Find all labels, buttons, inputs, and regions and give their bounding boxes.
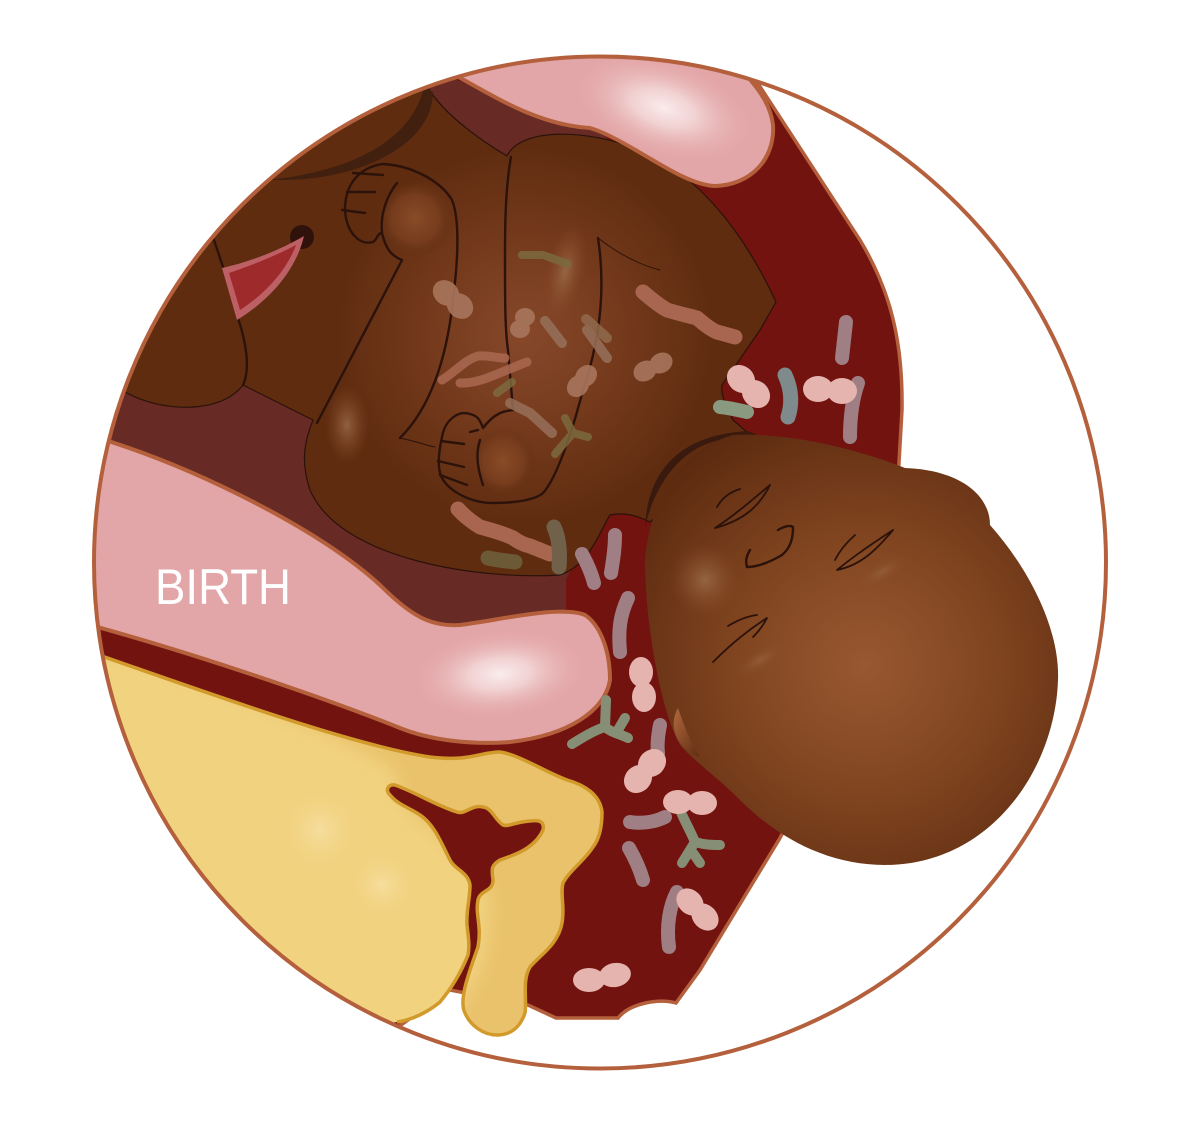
body highlights [325,178,595,498]
outer circle [94,56,1106,1068]
baby arms and hands outline [317,157,660,503]
illustration: birth canal [92,54,1108,1070]
baby body [126,88,777,576]
cervix tissue fill [106,660,600,1034]
birth canal wall [60,40,902,1040]
shoulder shadow [268,88,433,180]
left limb [214,240,247,385]
left pink tissue [70,440,610,743]
cervix outline [90,652,602,1035]
label: birth: BIRTH [155,559,291,615]
nose dot [290,225,314,249]
translucent microbes on body [428,255,735,567]
face lines [713,485,893,662]
uterine tissue [111,80,607,624]
top tissue highlight [598,68,730,148]
baby head shadow [645,431,760,527]
baby head [645,435,1058,865]
uterus body [106,660,491,1022]
ear [674,708,700,757]
mouth [222,236,304,320]
head highlights [680,554,892,666]
scene clipped to circle [96,58,1058,1037]
microbes in canal [572,322,858,992]
left tissue highlight [436,641,564,706]
top pink tissue [458,58,776,188]
